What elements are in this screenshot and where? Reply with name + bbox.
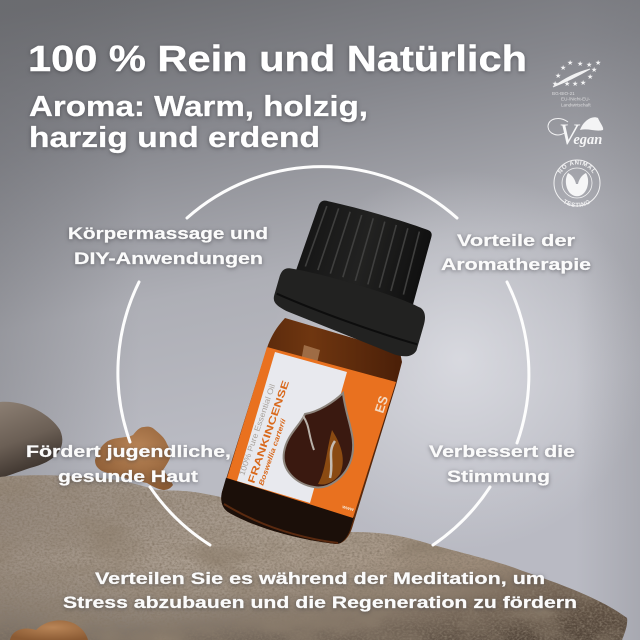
stars: ★ (577, 60, 583, 68)
label text: Boswellia carterii (258, 417, 288, 487)
stars: ★ (555, 72, 561, 80)
bottom dark band (221, 478, 354, 544)
label: mood: Stimmung (447, 468, 550, 486)
stars (552, 59, 601, 88)
flame drop (284, 393, 353, 487)
organic code text: Landwirtschaft (561, 102, 591, 108)
resin lump: bottom left (10, 620, 88, 640)
badge: no animal testing: NO ANIMAL (558, 160, 595, 174)
title: 100 % Rein und Natürlich (28, 38, 527, 79)
label: skin (26, 443, 231, 486)
badge: EU organic leaf (552, 59, 601, 108)
label: massage: Körpermassage und (68, 225, 268, 243)
stars: ★ (591, 66, 597, 74)
stars: ★ (552, 80, 558, 88)
large rock (0, 475, 627, 640)
label: skin: Fördert jugendliche, (26, 443, 231, 461)
stars: ★ (564, 80, 570, 88)
stone: upper left (0, 402, 62, 478)
label: aromatherapy: Vorteile der (457, 232, 576, 250)
label: skin: gesunde Haut (58, 468, 199, 486)
subtitle: Aroma: Warm, holzig, (29, 91, 368, 123)
stars: ★ (572, 80, 578, 88)
stars: ★ (586, 61, 592, 69)
organic code text (552, 91, 591, 108)
glass highlight (300, 345, 320, 372)
label: mood: Verbessert die (429, 443, 575, 461)
label: aromatherapy: Aromatherapie (441, 256, 591, 274)
subtitle: harzig und erdend (29, 122, 320, 154)
collar (268, 264, 429, 360)
label: meditation (63, 570, 577, 612)
label text: ES (372, 393, 391, 415)
bottle body (221, 318, 402, 544)
label: massage: DIY-Anwendungen (74, 250, 263, 268)
stars: ★ (580, 79, 586, 87)
label: mood (429, 443, 575, 486)
label text: www (340, 504, 354, 513)
label: meditation: Verteilen Sie es während der Meditation, um (95, 570, 545, 588)
circle ring segments (118, 167, 529, 545)
label: meditation: Stress abzubauen und die Regeneration zu fördern (63, 594, 577, 612)
label: aromatherapy (441, 232, 591, 274)
resin lump on rock (95, 427, 173, 490)
subtitle (29, 91, 368, 154)
stars: ★ (587, 73, 593, 81)
stars: ★ (560, 64, 566, 72)
dropper cap (268, 193, 450, 360)
amber base edge (224, 504, 338, 543)
label (227, 347, 396, 518)
organic code text: BG-BIO-21 (552, 91, 575, 96)
badge: no animal testing (554, 160, 600, 207)
badge: vegan: Vegan (559, 118, 602, 151)
label: massage (68, 225, 268, 268)
label text (237, 379, 391, 513)
feature labels (26, 225, 591, 612)
product: essential oil bottle (221, 193, 450, 544)
label text: FRANKINCENSE (246, 379, 292, 485)
stars: ★ (595, 59, 601, 67)
stars: ★ (567, 59, 573, 67)
label text: 100% Pure Essential Oil (237, 383, 277, 477)
badge: no animal testing: TESTING (564, 199, 590, 207)
organic code text: EU-/Nicht-EU- (561, 96, 591, 102)
